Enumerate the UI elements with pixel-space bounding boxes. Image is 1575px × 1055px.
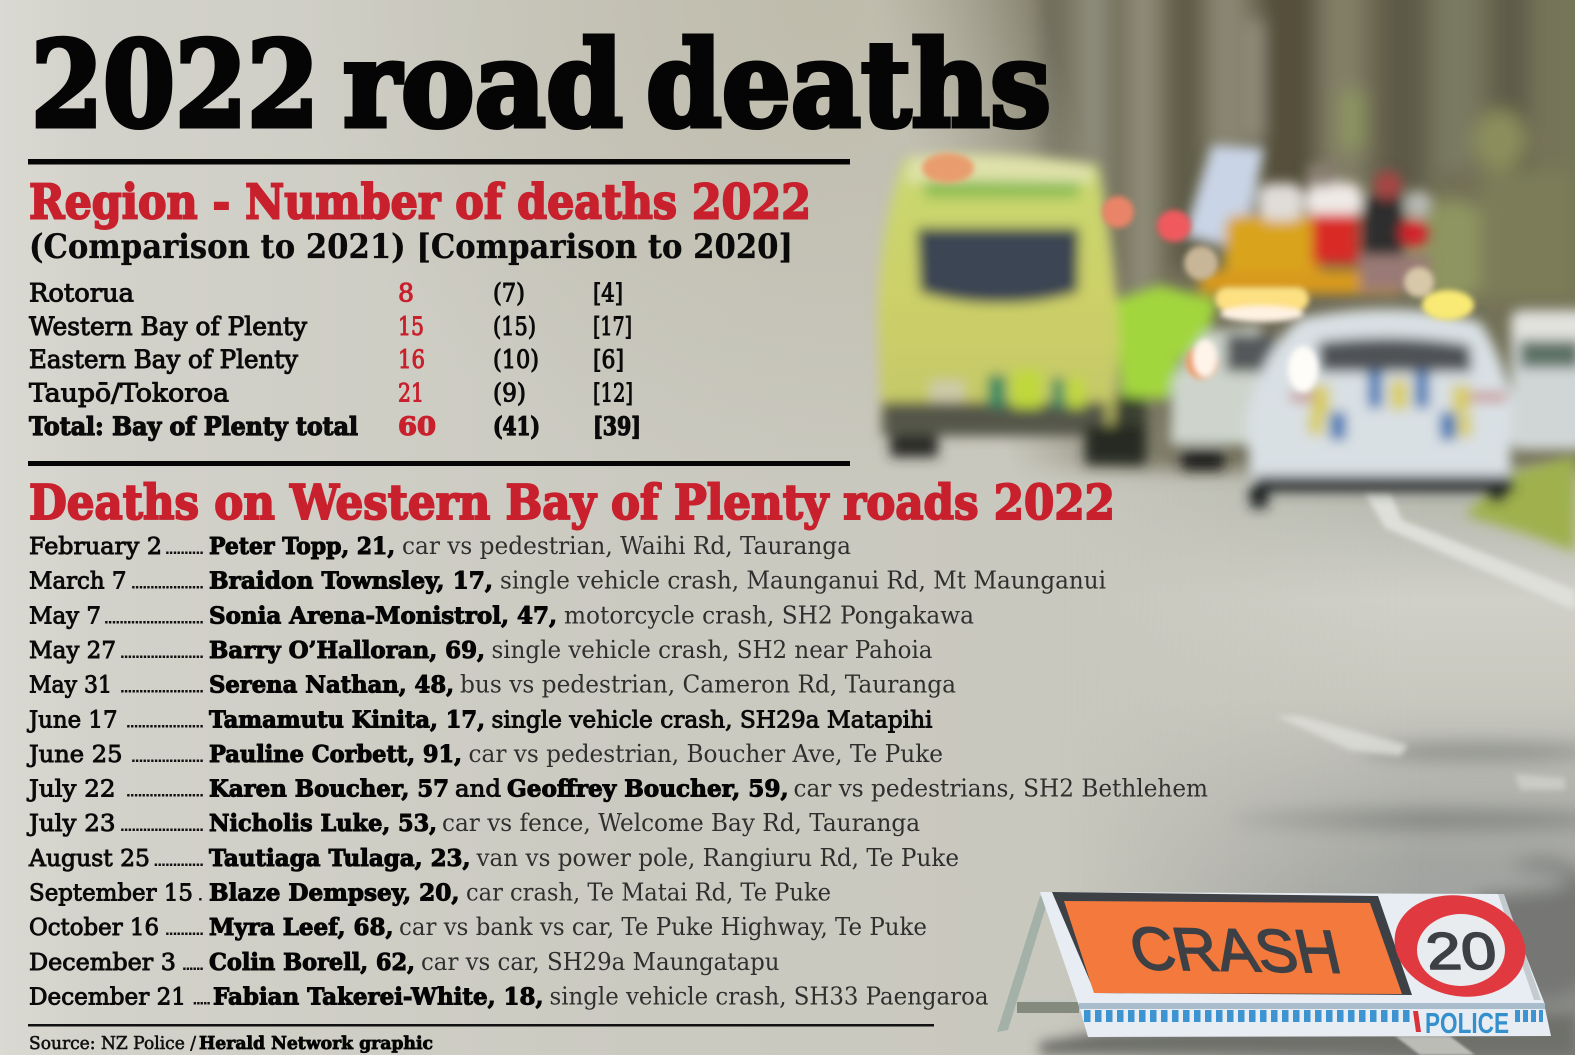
entry: May 27: ...................... — [120, 643, 204, 662]
entry: May 27: single vehicle crash, SH2 near Pahoia — [492, 636, 932, 664]
entry: December 21: Fabian Takerei-White, 18, — [213, 984, 544, 1010]
subheading: comparison: (Comparison to 2021) [Comparison to 2020] — [29, 227, 793, 267]
entry: May 31: ...................... — [120, 678, 204, 697]
entry: July 22: Karen Boucher, 57 — [209, 776, 449, 803]
entry: June 17: June 17 — [27, 707, 118, 733]
entry: December 21: December 21 — [29, 984, 186, 1010]
entry: May 7: .......................... — [104, 608, 204, 627]
icon: police crash sign: POLICE — [1425, 1008, 1509, 1040]
sign stand — [997, 896, 1048, 1032]
row: Taupo/Tokoroa: 21 — [398, 378, 424, 408]
fire truck — [1184, 145, 1264, 250]
entry: May 31: Serena Nathan, 48, — [209, 672, 454, 699]
divider: below table — [28, 461, 850, 466]
asphalt beneath sign — [1040, 1015, 1575, 1055]
entry: September 15: car crash, Te Matai Rd, Te Puke — [466, 878, 831, 906]
row: Taupo/Tokoroa: (9) — [493, 378, 526, 408]
entry: March 7 — [29, 567, 1106, 595]
entry: June 25: car vs pedestrian, Boucher Ave, Te Puke — [468, 740, 943, 768]
entry: May 7: May 7 — [29, 603, 101, 629]
entry: September 15: . — [198, 886, 203, 904]
entry: August 25: Tautiaga Tulaga, 23, — [209, 845, 470, 872]
entry: July 22: car vs pedestrians, SH2 Bethlehem — [794, 775, 1208, 803]
second car — [1170, 325, 1260, 445]
entry: July 23: car vs fence, Welcome Bay Rd, Tauranga — [442, 809, 920, 837]
entry: October 16: October 16 — [29, 915, 159, 941]
third car — [1511, 310, 1575, 450]
entry: August 25: ............. — [154, 851, 204, 870]
orange crash panel — [1052, 892, 1412, 995]
title: road — [343, 15, 623, 154]
grass verge — [1465, 455, 1575, 552]
title: deaths — [646, 15, 1051, 154]
entry: December 21: single vehicle crash, SH33 Paengaroa — [550, 982, 988, 1010]
entry: May 7: Sonia Arena-Monistrol, 47, — [209, 602, 557, 629]
entry: July 23 — [27, 809, 920, 837]
entry: May 27: May 27 — [29, 638, 116, 664]
ambulance body — [878, 154, 1120, 435]
entry: June 25: Pauline Corbett, 91, — [209, 741, 462, 768]
row: Taupo/Tokoroa: Taupō/Tokoroa — [29, 378, 229, 408]
entry: May 7 — [29, 601, 974, 629]
officer — [1105, 395, 1147, 465]
entry: June 25: June 25 — [27, 742, 123, 768]
entry: May 31: May 31 — [29, 673, 112, 699]
entry: May 27: Barry O’Halloran, 69, — [209, 637, 485, 664]
entry: July 22: July 22 — [27, 777, 116, 803]
road markings — [1276, 492, 1575, 790]
entry: July 23: July 23 — [27, 811, 116, 837]
panel: region deaths table — [29, 174, 811, 441]
icon: police crash sign: CRASH — [1123, 915, 1347, 985]
entry: May 31: bus vs pedestrian, Cameron Rd, Tauranga — [460, 671, 956, 699]
entry: October 16 — [29, 913, 927, 941]
entry: July 22 — [27, 775, 1208, 803]
entry: May 31 — [29, 671, 956, 699]
divider: below title — [28, 159, 850, 164]
tree line — [880, 0, 1575, 470]
rig and vehicles — [878, 145, 1575, 508]
row: Bay of Plenty total: (41) — [493, 412, 540, 441]
row: Western Bay of Plenty: [17] — [593, 312, 632, 341]
entry: July 22: and — [455, 777, 501, 803]
row: Eastern Bay of Plenty: (10) — [493, 345, 539, 374]
icon: police crash sign: 20 — [1423, 923, 1499, 981]
entry: December 3 — [29, 948, 780, 976]
entry: July 22: Geoffrey Boucher, 59, — [507, 776, 788, 803]
source credit: Source: NZ Police / — [29, 1033, 197, 1054]
entry: August 25: August 25 — [28, 846, 150, 872]
entry: June 17: single vehicle crash, SH29a Matapihi — [492, 707, 932, 733]
row: Western Bay of Plenty — [29, 312, 632, 341]
row: Eastern Bay of Plenty: 16 — [398, 345, 425, 374]
entry: February 2: car vs pedestrian, Waihi Rd, Tauranga — [402, 532, 851, 560]
entry: September 15 — [29, 878, 831, 906]
row: Rotorua: 8 — [398, 278, 414, 308]
row: Western Bay of Plenty: Western Bay of Plenty — [29, 312, 308, 341]
entry: March 7: March 7 — [29, 569, 126, 595]
heading: region number of deaths: Region - Number of deaths 2022 — [29, 174, 811, 230]
speed limit disc — [1385, 883, 1535, 1009]
entry: February 2: .......... — [165, 539, 204, 558]
entry: December 3: ...... — [182, 955, 204, 974]
source credit — [29, 1033, 433, 1054]
row: Taupo/Tokoroa — [29, 378, 633, 408]
entry: October 16: Myra Leef, 68, — [209, 914, 394, 941]
sign panel — [1040, 892, 1551, 1037]
road surface — [1128, 482, 1575, 1055]
entry: February 2 — [29, 532, 851, 560]
row: Rotorua — [29, 278, 623, 308]
entry: July 23: Nicholis Luke, 53, — [209, 810, 437, 837]
entry: March 7: ................... — [131, 574, 204, 593]
row: Western Bay of Plenty: 15 — [398, 312, 424, 341]
entry: December 21 — [29, 982, 988, 1010]
entry: December 3: Colin Borell, 62, — [209, 949, 415, 976]
entry: May 7: motorcycle crash, SH2 Pongakawa — [564, 601, 974, 629]
title — [31, 15, 1051, 154]
row: Eastern Bay of Plenty — [29, 345, 624, 374]
row: Bay of Plenty total: 60 — [398, 412, 436, 441]
icon: police crash sign — [997, 883, 1575, 1055]
row: Eastern Bay of Plenty: Eastern Bay of Plenty — [29, 345, 299, 374]
entry: June 25 — [27, 740, 943, 768]
row: Rotorua: [4] — [593, 278, 623, 308]
entry: October 16: .......... — [165, 920, 204, 939]
row: Taupo/Tokoroa: [12] — [593, 378, 633, 408]
source credit: Herald Network graphic — [199, 1033, 433, 1054]
entry: December 3: car vs car, SH29a Maungatapu — [421, 948, 780, 976]
entry: March 7: Braidon Townsley, 17, — [209, 568, 493, 595]
entry: August 25 — [28, 844, 959, 872]
entry: February 2: Peter Topp, 21, — [209, 533, 395, 560]
entry: July 23: ...................... — [120, 816, 204, 835]
row: Rotorua: (7) — [493, 278, 525, 308]
entry: June 17: Tamamutu Kinita, 17, — [209, 706, 485, 733]
entry: August 25: van vs power pole, Rangiuru Rd, Te Puke — [476, 844, 959, 872]
flashing lights — [922, 153, 1474, 392]
title: 2022 — [31, 15, 319, 154]
heading: deaths on Western Bay of Plenty roads: Deaths on Western Bay of Plenty roads 2022 — [29, 475, 1115, 531]
entry: June 17 — [27, 706, 933, 733]
entry: September 15: September 15 — [29, 880, 193, 906]
row: Bay of Plenty total: [39] — [593, 412, 641, 441]
panel: list of Western Bay of Plenty deaths — [27, 475, 1208, 1010]
entry: October 16: car vs bank vs car, Te Puke Highway, Te Puke — [399, 913, 927, 941]
entry: May 27 — [29, 636, 932, 664]
entry: July 22: .................... — [126, 782, 204, 801]
entry: September 15: Blaze Dempsey, 20, — [209, 880, 460, 906]
main police car — [1246, 309, 1512, 480]
row: Bay of Plenty total: Total: Bay of Plenty total — [29, 412, 358, 441]
row: Rotorua: Rotorua — [29, 278, 134, 308]
entry: June 17: .................... — [126, 712, 204, 731]
entry: March 7: single vehicle crash, Maunganui Rd, Mt Maunganui — [500, 567, 1106, 595]
row: Bay of Plenty total — [29, 412, 641, 441]
entry: December 3: December 3 — [29, 950, 176, 976]
police strip — [1084, 1010, 1411, 1022]
row: Eastern Bay of Plenty: [6] — [593, 345, 624, 374]
entry: December 21: ..... — [192, 990, 211, 1008]
entry: February 2: February 2 — [29, 534, 162, 560]
entry: June 25: ................... — [131, 747, 204, 766]
divider: above source — [28, 1024, 934, 1026]
row: Western Bay of Plenty: (15) — [493, 312, 536, 341]
